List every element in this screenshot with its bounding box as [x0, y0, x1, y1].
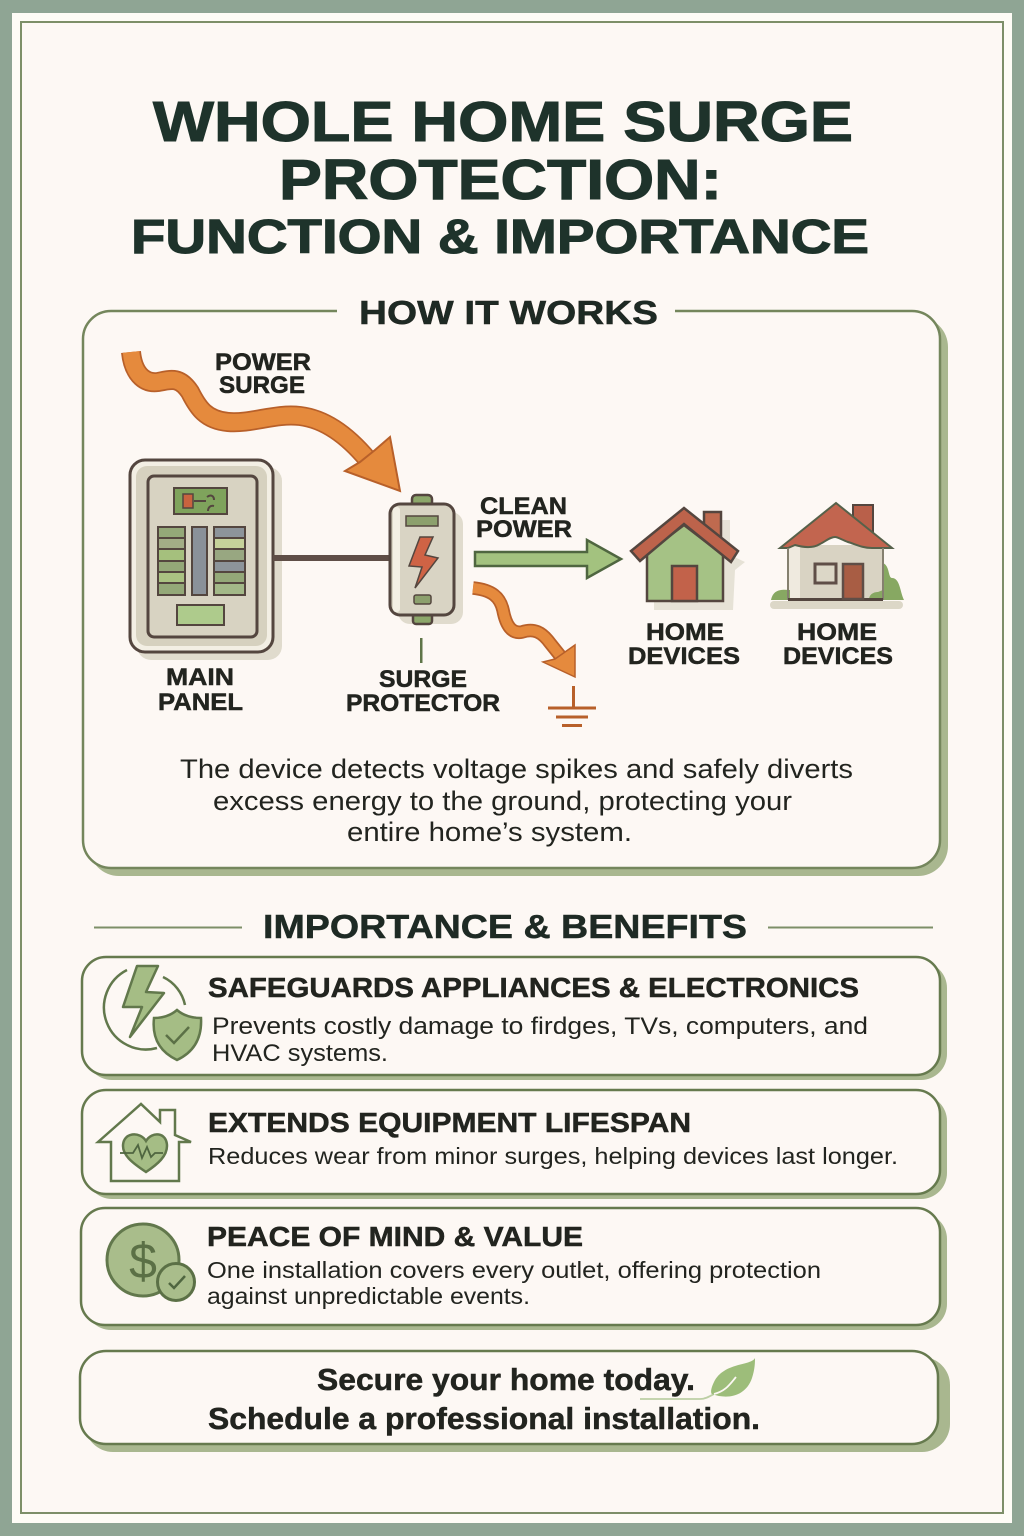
- label: home devices 1: [628, 619, 740, 670]
- panel: extends lifespan: EXTENDS EQUIPMENT LIFESPAN: [208, 1107, 691, 1138]
- text: how it works description: excess energy to the ground, protecting your: [213, 786, 792, 816]
- arrow: clean power: [475, 540, 621, 578]
- panel: call to action: [80, 1351, 950, 1452]
- leader line: surge protector: [420, 638, 422, 663]
- panel: safeguards appliances: SAFEGUARDS APPLIANCES & ELECTRONICS: [208, 972, 859, 1003]
- arrow: power surge: [131, 352, 400, 491]
- title: WHOLE HOME SURGE: [153, 90, 853, 154]
- text: call to action: [208, 1362, 760, 1436]
- text: call to action: Schedule a professional installation.: [208, 1401, 760, 1436]
- panel: safeguards appliances: [82, 957, 947, 1080]
- label: clean power: CLEAN: [480, 493, 567, 520]
- text: safeguards description: [212, 1013, 868, 1067]
- panel: peace of mind: PEACE OF MIND & VALUE: [207, 1221, 583, 1252]
- label: main panel: PANEL: [158, 689, 243, 716]
- icon: leaf: [640, 1358, 755, 1399]
- label: main panel: MAIN: [166, 664, 234, 691]
- text: call to action: Secure your home today.: [317, 1362, 695, 1397]
- text: lifespan description: Reduces wear from minor surges, helping devices last longer.: [208, 1143, 898, 1169]
- icon: beige house: [770, 503, 904, 609]
- heading: how it works: HOW IT WORKS: [359, 294, 658, 331]
- text: peace of mind description: against unpredictable events.: [207, 1283, 530, 1309]
- text: peace of mind description: [207, 1257, 821, 1309]
- label: home devices 2: HOME: [797, 619, 877, 646]
- wire: panel to protector: [273, 555, 391, 561]
- panel: extends lifespan: [82, 1090, 947, 1199]
- label: surge protector: [346, 666, 500, 717]
- icon: dollar coin with check: [107, 1224, 194, 1300]
- title: PROTECTION:: [279, 148, 722, 212]
- text: safeguards description: HVAC systems.: [212, 1040, 388, 1067]
- icon: dollar coin with check: $: [129, 1233, 157, 1289]
- label: home devices 2: [783, 619, 893, 670]
- icon: surge protector: [390, 495, 463, 624]
- title: FUNCTION & IMPORTANCE: [131, 211, 869, 264]
- label: surge protector: SURGE: [379, 666, 467, 693]
- label: surge protector: PROTECTOR: [346, 690, 500, 717]
- arrow: diverted to ground: [473, 588, 575, 677]
- label: home devices 1: HOME: [646, 619, 724, 646]
- panel: how it works: [83, 294, 948, 876]
- title: [131, 90, 869, 264]
- icon: green house: [631, 508, 745, 610]
- text: how it works description: The device detects voltage spikes and safely diverts: [180, 754, 853, 784]
- text: how it works description: entire home’s system.: [347, 817, 632, 847]
- icon: house with heart: [98, 1104, 191, 1181]
- heading: importance and benefits: IMPORTANCE & BENEFITS: [263, 908, 747, 945]
- label: home devices 1: DEVICES: [628, 643, 740, 670]
- icon: ground symbol: [548, 686, 596, 727]
- text: safeguards description: Prevents costly damage to firdges, TVs, computers, and: [212, 1013, 868, 1040]
- label: clean power: [476, 493, 572, 543]
- label: power surge: SURGE: [219, 372, 305, 399]
- label: home devices 2: DEVICES: [783, 643, 893, 670]
- icon: bolt and shield: [104, 966, 201, 1060]
- label: power surge: [215, 349, 311, 399]
- label: main panel: [158, 664, 243, 716]
- label: clean power: POWER: [476, 516, 572, 543]
- label: power surge: POWER: [215, 349, 311, 376]
- text: how it works description: [180, 754, 853, 847]
- text: peace of mind description: One installation covers every outlet, offering protection: [207, 1257, 821, 1283]
- icon: main panel: [130, 460, 282, 660]
- panel: peace of mind: [81, 1208, 947, 1330]
